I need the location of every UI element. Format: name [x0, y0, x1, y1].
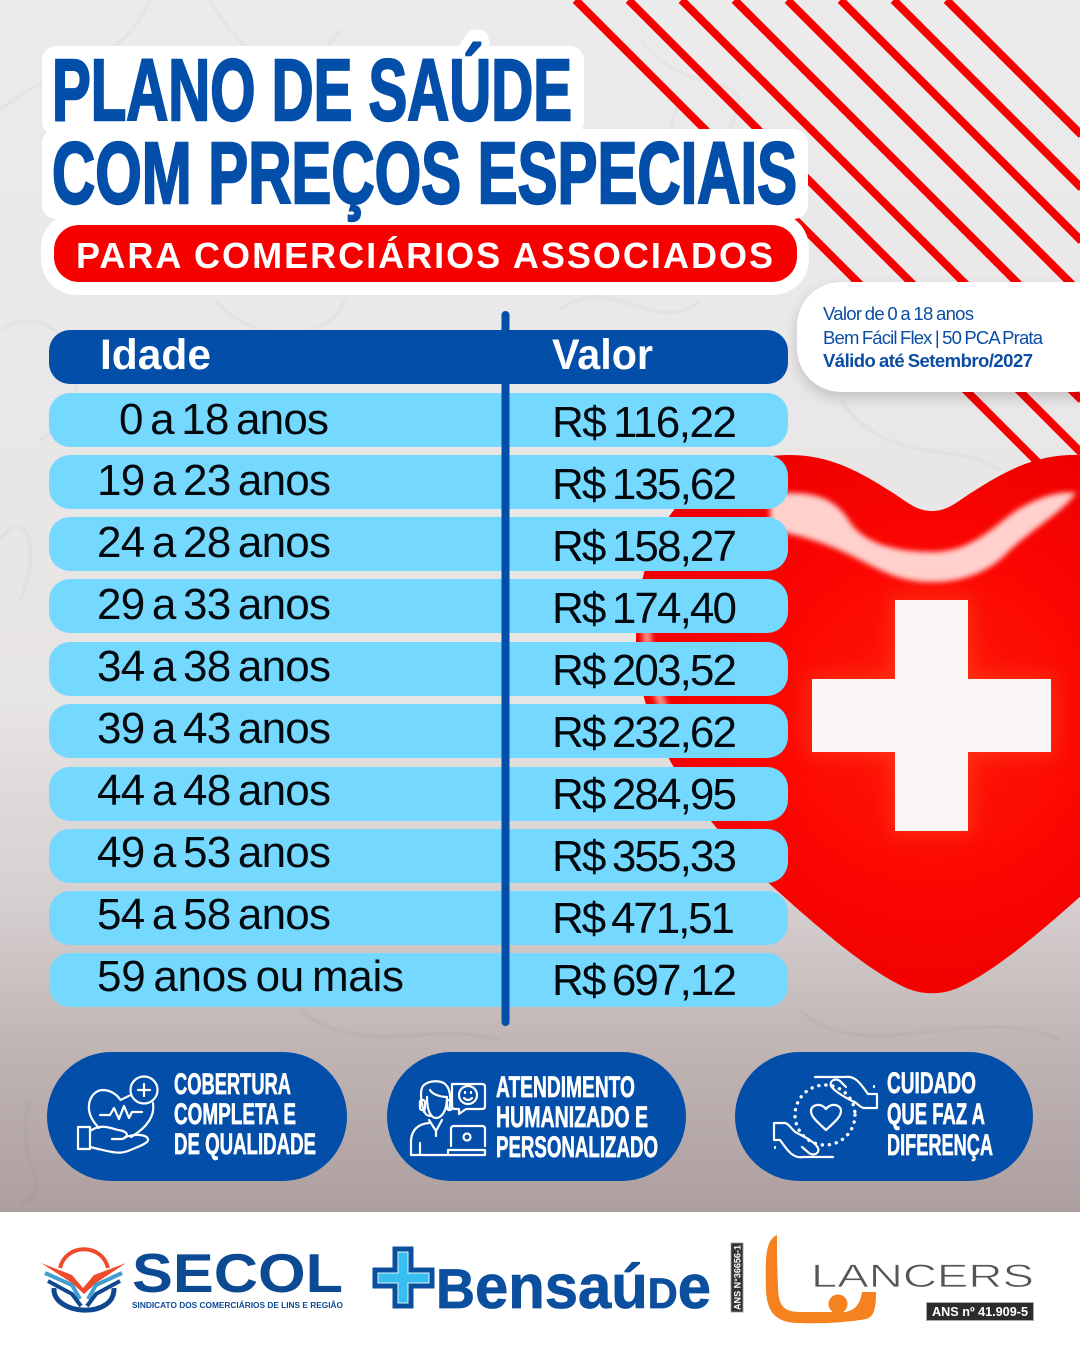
label: HUMANIZADO E: [496, 1101, 648, 1134]
age labels: 59 anos ou mais: [97, 952, 404, 1001]
prices: R$ 232,62: [552, 708, 737, 757]
prices: R$ 203,52: [552, 646, 737, 695]
age labels: 54 a 58 anos: [97, 890, 331, 939]
title: PLANO DE SAÚDE: [52, 42, 572, 139]
age labels: 29 a 33 anos: [97, 580, 331, 629]
prices: R$ 158,27: [552, 522, 737, 571]
white cross: [812, 600, 1051, 831]
age labels: 19 a 23 anos: [97, 456, 331, 505]
callout: validity note: Valor de 0 a 18 anos: [823, 303, 974, 324]
age labels: 44 a 48 anos: [97, 766, 331, 815]
prices: R$ 697,12: [552, 956, 737, 1005]
age labels: 0 a 18 anos: [119, 395, 329, 444]
ANS tag: Lancers: ANS nº 41.909-5: [932, 1304, 1028, 1319]
panel: cobertura: [47, 1052, 347, 1181]
table header: [49, 330, 788, 384]
label: COBERTURA: [174, 1068, 291, 1101]
prices: R$ 284,95: [552, 770, 737, 819]
logo: Bensaúde: Bensaúde: [436, 1253, 711, 1322]
ANS tag: Bensaúde: ANS N°36656-1: [732, 1245, 742, 1310]
label: [496, 1071, 658, 1164]
callout: validity note: Bem Fácil Flex | 50 PCA Prata: [823, 327, 1044, 348]
label: DIFERENÇA: [887, 1129, 993, 1162]
logo: SECOL: [41, 1242, 343, 1310]
label: PERSONALIZADO: [496, 1131, 658, 1164]
logo: Lancers: [766, 1235, 1034, 1323]
table header: Valor: [552, 331, 653, 379]
callout: validity note: [797, 282, 1080, 398]
title: PLANO DE SAÚDE: [52, 42, 572, 139]
emblem: [41, 1249, 126, 1310]
red diagonal stripes: [576, 0, 1080, 506]
prices: R$ 471,51: [552, 894, 735, 943]
label: [174, 1068, 316, 1161]
age labels: 34 a 38 anos: [97, 642, 331, 691]
prices: R$ 355,33: [552, 832, 737, 881]
label: CUIDADO: [887, 1067, 976, 1100]
label: QUE FAZ A: [887, 1098, 985, 1131]
table header: Idade: [100, 331, 211, 379]
icon: two hands around a heart: [774, 1077, 877, 1157]
label: DE QUALIDADE: [174, 1128, 316, 1161]
prices: R$ 174,40: [552, 584, 737, 633]
title: [41, 42, 809, 295]
subtitle banner: [54, 225, 797, 282]
callout: validity note: Válido até Setembro/2027: [823, 350, 1033, 371]
table rows: [49, 393, 788, 1007]
logo: SECOL: SECOL: [132, 1242, 343, 1304]
panel: cuidado: [735, 1052, 1033, 1181]
icon: red heart with white cross: [636, 455, 1080, 993]
prices: R$ 135,62: [552, 460, 737, 509]
column divider: [502, 311, 510, 1026]
panel: atendimento: [387, 1052, 686, 1181]
price table: [49, 311, 788, 1026]
prices: [552, 398, 737, 1005]
icon: heart in hand: [78, 1076, 158, 1153]
label: ATENDIMENTO: [496, 1071, 635, 1104]
logo: Lancers: LANCERS: [811, 1258, 1034, 1294]
age labels: 39 a 43 anos: [97, 704, 331, 753]
icon: attendant with headset: [411, 1081, 485, 1155]
label: [887, 1067, 993, 1162]
age labels: 24 a 28 anos: [97, 518, 331, 567]
label: COMPLETA E: [174, 1098, 296, 1131]
logo: SECOL: SINDICATO DOS COMERCIÁRIOS DE LINS E REGIÃO: [132, 1300, 343, 1310]
subtitle banner: PARA COMERCIÁRIOS ASSOCIADOS: [76, 235, 773, 276]
footer band: [0, 1212, 1080, 1350]
age labels: 49 a 53 anos: [97, 828, 331, 877]
prices: R$ 116,22: [552, 398, 737, 447]
age labels: [97, 395, 404, 1001]
